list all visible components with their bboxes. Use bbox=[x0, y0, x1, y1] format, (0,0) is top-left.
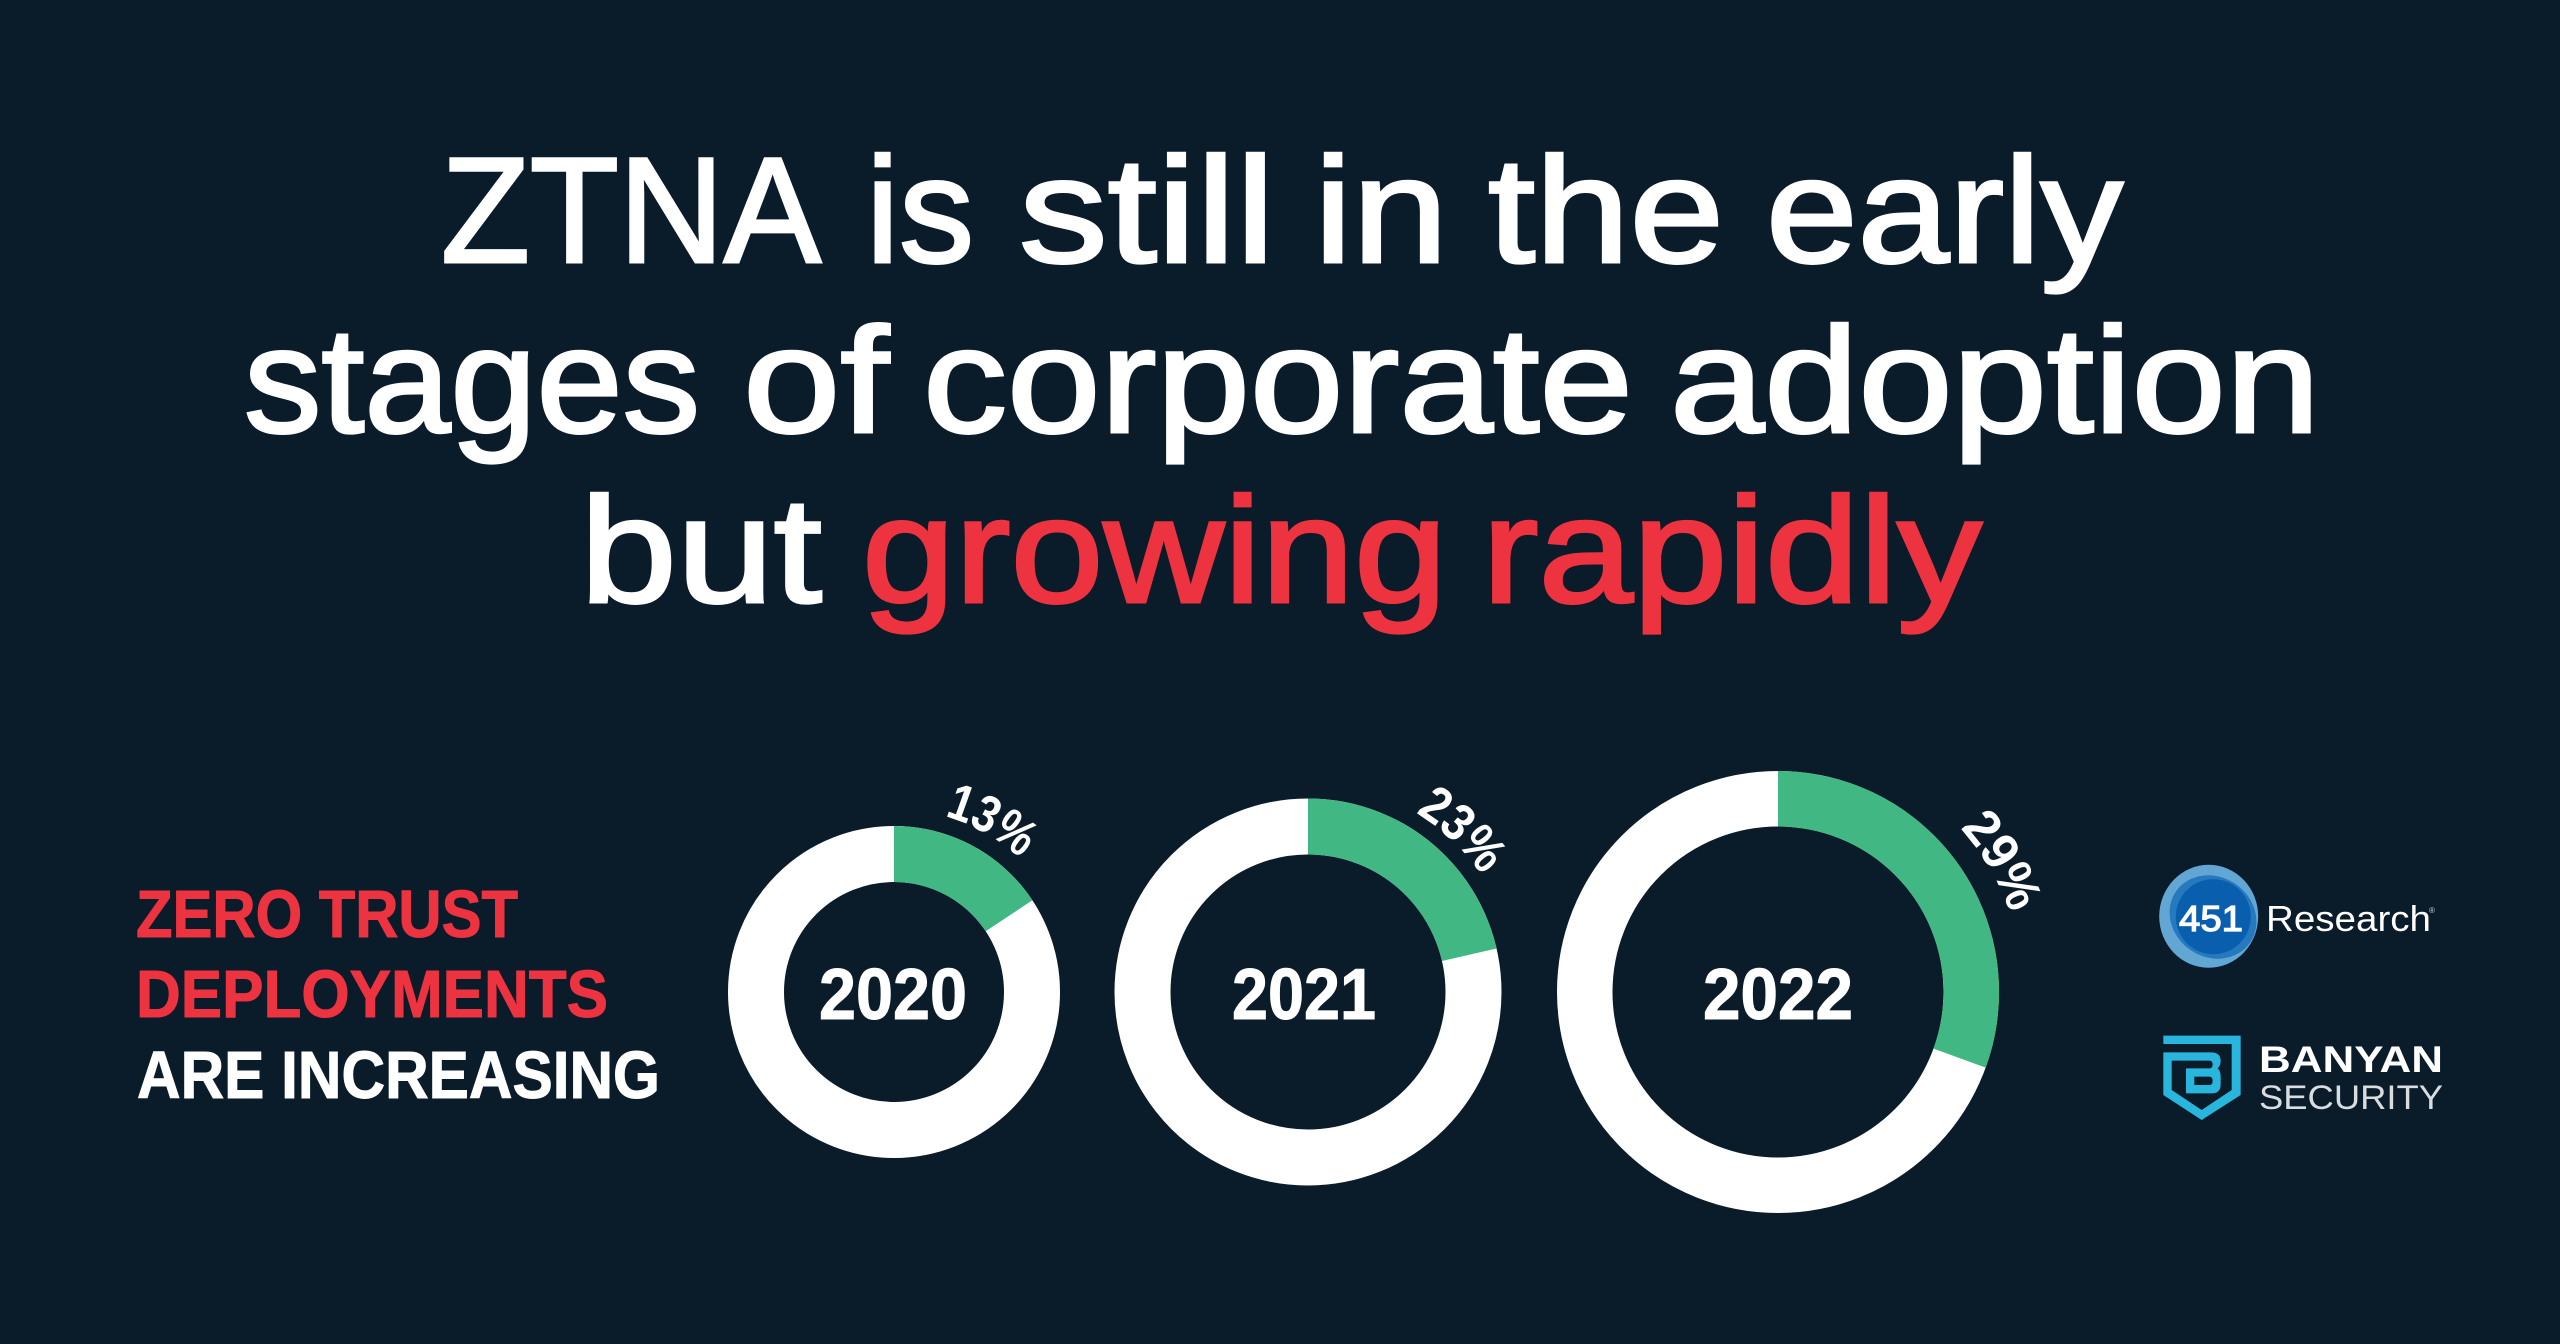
title line 1: ZTNA bbox=[441, 126, 821, 294]
title line 2: corporate bbox=[923, 296, 1633, 464]
title line 1: the bbox=[1488, 126, 1724, 294]
side label: zero trust deployments are increasing: ARE INCREASING bbox=[137, 1038, 660, 1113]
title line 1: is bbox=[866, 126, 974, 294]
title line 1: in bbox=[1314, 126, 1448, 294]
title highlight: growing rapidly: rapidly bbox=[1482, 466, 1982, 634]
title line 1 bbox=[441, 126, 2123, 294]
title bbox=[244, 126, 2320, 634]
donut chart: 2022, 29% bbox=[1557, 771, 2040, 1213]
donut chart: 2020, 13%: 2020 bbox=[819, 955, 967, 1035]
side label: zero trust deployments are increasing: ZERO TRUST bbox=[136, 877, 518, 952]
side label: zero trust deployments are increasing bbox=[136, 877, 660, 1113]
title highlight: growing rapidly: growing bbox=[862, 466, 1447, 634]
donut chart: 2020, 13%: 13% bbox=[947, 786, 1036, 855]
donut chart: 2021, 23%: 23% bbox=[1417, 788, 1506, 872]
title line 2 bbox=[244, 296, 2320, 464]
title line 3: but bbox=[580, 466, 822, 634]
title line 2: adoption bbox=[1670, 296, 2320, 464]
donut chart: 2021, 23% bbox=[1114, 788, 1506, 1186]
logo: Banyan Security bbox=[2163, 1036, 2443, 1120]
icon: 451 circle: 451 bbox=[2179, 898, 2243, 939]
donut chart: 2021, 23%: 2021 bbox=[1232, 955, 1376, 1035]
donut chart: 2022, 29%: 2022 bbox=[1703, 955, 1853, 1035]
title highlight: growing rapidly bbox=[862, 466, 1982, 634]
title line 1: early bbox=[1766, 126, 2123, 294]
icon: shield B bbox=[2163, 1036, 2241, 1120]
logo: Banyan Security: BANYAN bbox=[2259, 1039, 2443, 1080]
logo: 451 Research: Research bbox=[2266, 898, 2431, 939]
icon: 451 circle bbox=[2153, 858, 2273, 976]
donut chart: 2020, 13% bbox=[728, 786, 1060, 1158]
title line 2: of bbox=[743, 296, 889, 464]
side label: zero trust deployments are increasing: DEPLOYMENTS bbox=[136, 957, 608, 1032]
logo: 451 Research: ® bbox=[2429, 906, 2435, 915]
logo: Banyan Security: SECURITY bbox=[2259, 1079, 2443, 1117]
logo: 451 Research bbox=[2153, 858, 2435, 976]
title line 2: stages bbox=[244, 296, 700, 464]
donut chart: 2022, 29%: 29% bbox=[1961, 810, 2040, 910]
title line 1: still bbox=[1019, 126, 1275, 294]
